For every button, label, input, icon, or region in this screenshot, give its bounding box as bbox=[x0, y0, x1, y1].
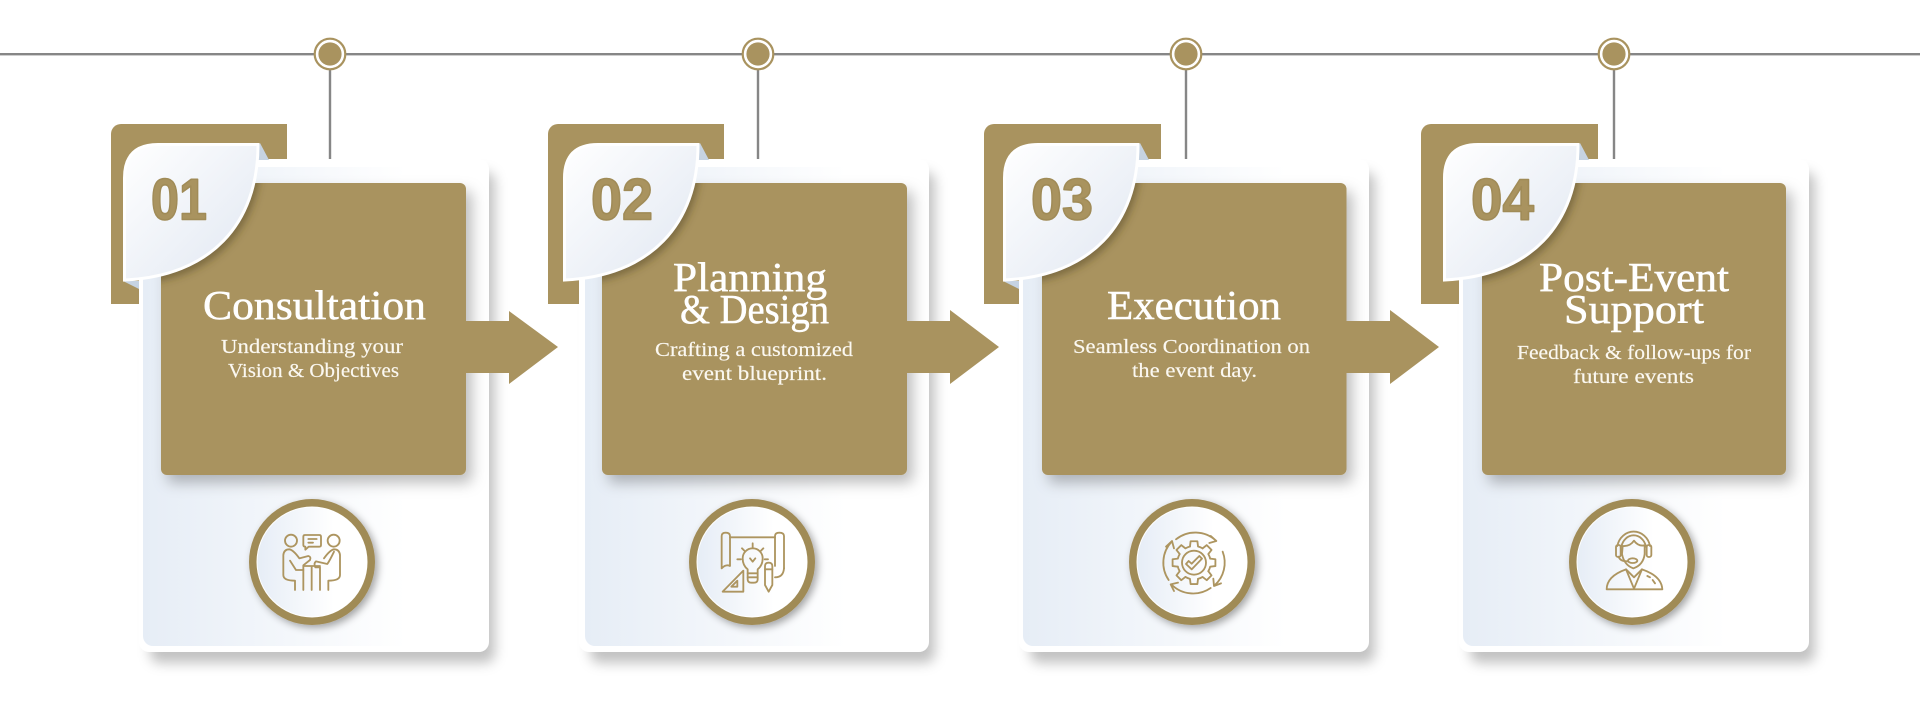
description: Feedback & follow-ups for bbox=[1517, 342, 1751, 364]
timeline line bbox=[0, 53, 1920, 55]
number leaf bbox=[1444, 143, 1589, 285]
timeline node 1 bbox=[315, 39, 345, 159]
icon badge: gear cycle bbox=[1129, 499, 1255, 625]
gold panel bbox=[1042, 183, 1346, 475]
arrow bbox=[907, 310, 999, 384]
heading: Post-Event bbox=[1539, 254, 1730, 300]
card bbox=[1019, 159, 1375, 663]
heading: Planning bbox=[673, 254, 827, 300]
description: future events bbox=[1573, 366, 1694, 388]
heading: Consultation bbox=[203, 282, 426, 328]
description: event blueprint. bbox=[682, 363, 827, 385]
panel: step 1 consultation bbox=[111, 124, 558, 663]
description bbox=[655, 339, 853, 385]
description: Vision & Objectives bbox=[228, 360, 399, 382]
icon badge: meeting bbox=[249, 499, 375, 625]
card bbox=[1459, 159, 1815, 663]
panel: step 4 post-event support bbox=[1421, 124, 1815, 663]
number leaf: 04 bbox=[1471, 168, 1534, 232]
timeline node 3 bbox=[1171, 39, 1201, 159]
timeline node 4 bbox=[1599, 39, 1629, 159]
gold panel bbox=[602, 183, 907, 475]
description: Crafting a customized bbox=[655, 339, 853, 361]
card bbox=[579, 159, 935, 663]
icon badge: headset agent bbox=[1569, 499, 1695, 625]
gold panel bbox=[1482, 183, 1786, 475]
arrow bbox=[466, 311, 558, 384]
description bbox=[221, 336, 403, 382]
description: Understanding your bbox=[221, 336, 403, 358]
description: the event day. bbox=[1132, 360, 1257, 382]
heading bbox=[1539, 254, 1730, 332]
arrow bbox=[1346, 310, 1439, 384]
back tab bbox=[1421, 124, 1598, 304]
number leaf bbox=[1003, 143, 1149, 289]
number leaf: 02 bbox=[591, 168, 653, 232]
description bbox=[1517, 342, 1751, 388]
number leaf: 03 bbox=[1031, 168, 1093, 232]
gold panel bbox=[161, 183, 466, 475]
number leaf bbox=[123, 143, 269, 289]
timeline node 2 bbox=[743, 39, 773, 159]
description bbox=[1073, 336, 1310, 382]
back tab bbox=[111, 124, 287, 304]
number leaf bbox=[564, 143, 709, 285]
panel: step 2 planning and design bbox=[548, 124, 999, 663]
icon badge: blueprint and lightbulb bbox=[689, 499, 815, 625]
description: Seamless Coordination on bbox=[1073, 336, 1310, 358]
back tab bbox=[984, 124, 1161, 304]
panel: step 3 execution bbox=[984, 124, 1439, 663]
back tab bbox=[548, 124, 724, 304]
card bbox=[139, 159, 495, 663]
heading: Support bbox=[1564, 286, 1705, 332]
number leaf: 01 bbox=[151, 168, 207, 232]
heading: Execution bbox=[1107, 282, 1281, 328]
heading: & Design bbox=[680, 286, 829, 332]
heading bbox=[673, 254, 829, 332]
